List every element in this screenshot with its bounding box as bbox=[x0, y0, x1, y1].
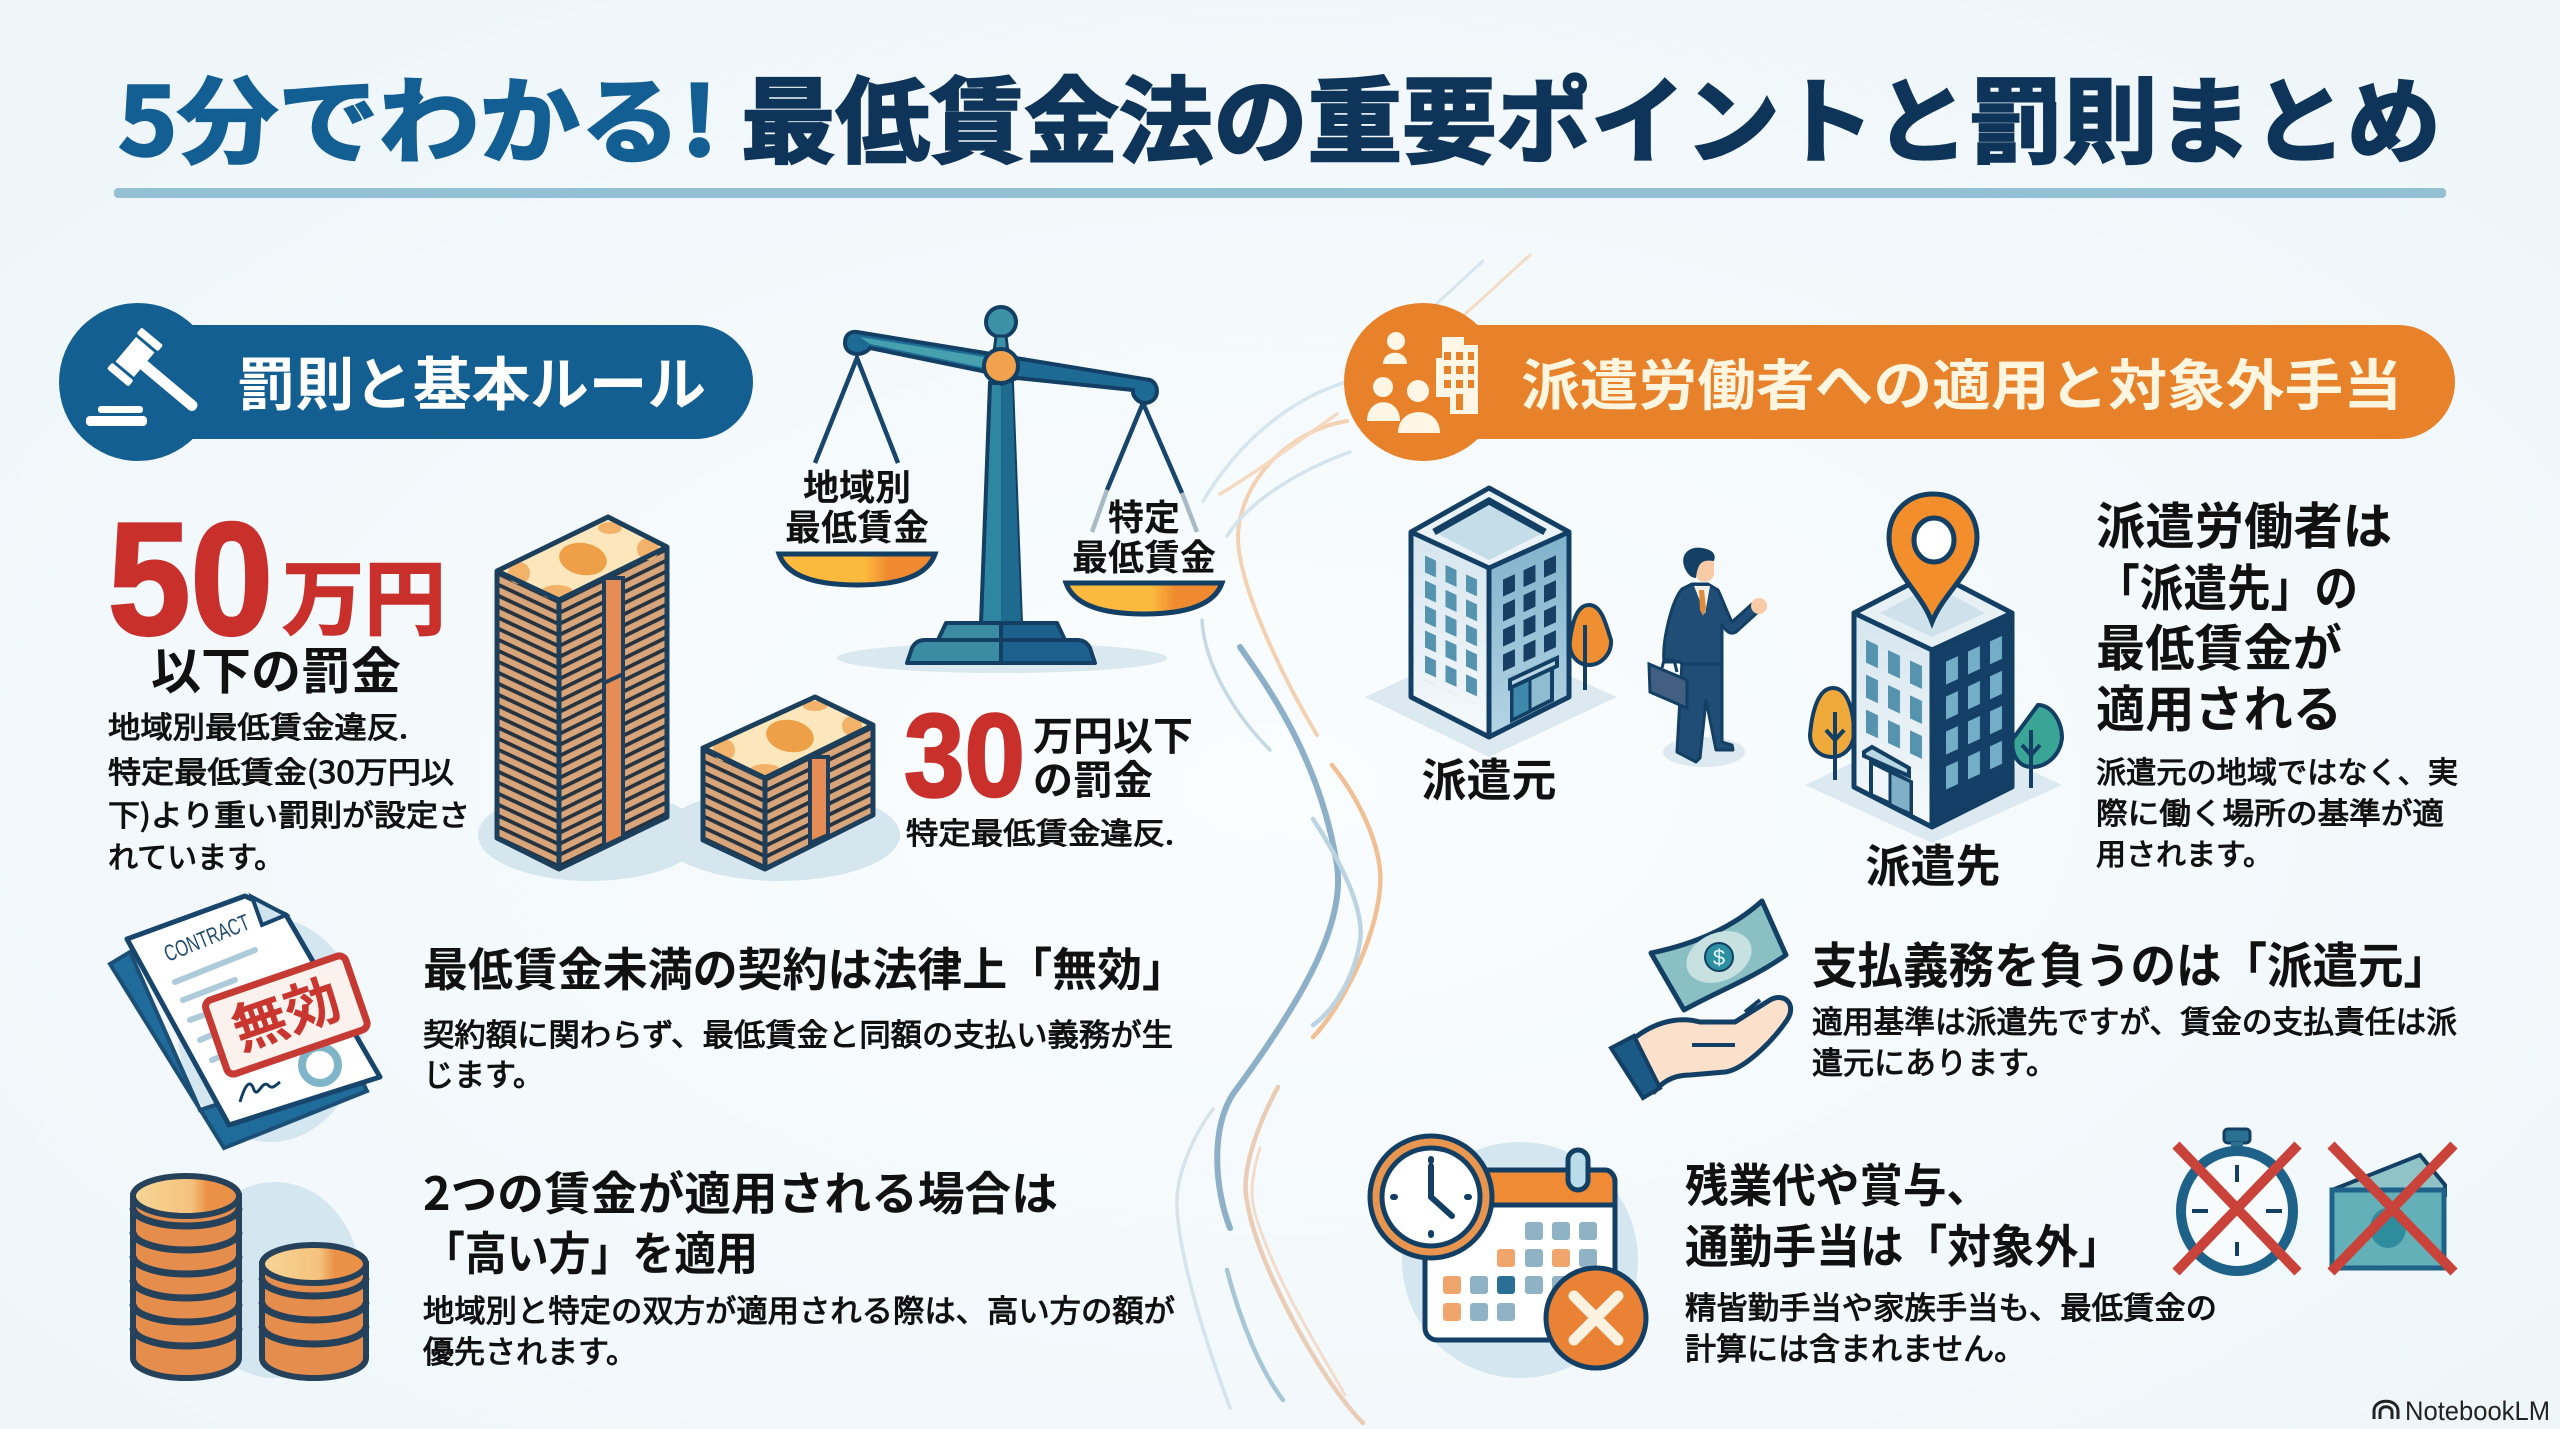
icon: void contract: CONTRACT bbox=[160, 909, 253, 967]
text block: payment duty lies with dispatching company: 遣元にあります。 bbox=[1812, 1038, 2057, 1083]
callout: 500,000 yen fine: 特定最低賃金(30万円以 bbox=[108, 748, 454, 792]
icon: host company building with location pin bbox=[1805, 494, 2062, 843]
text block: higher wage applies: 2つの賃金が適用される場合は bbox=[423, 1158, 1058, 1224]
label: dispatching company: 派遣元 bbox=[1421, 744, 1557, 809]
icon: crossed-out stopwatch bbox=[2176, 1129, 2298, 1272]
text block: overtime and allowances excluded bbox=[1685, 1150, 2217, 1369]
text block: contract below minimum wage is void bbox=[423, 934, 1187, 1095]
text block: payment duty lies with dispatching company: 支払義務を負うのは「派遣元」 bbox=[1812, 927, 2449, 998]
scale labels: 最低賃金 bbox=[785, 499, 929, 551]
logo: NotebookLM: NotebookLM bbox=[2405, 1396, 2550, 1426]
title: 最低賃金法の重要ポイントと罰則まとめ bbox=[741, 47, 2441, 183]
text block: host company minimum wage applies: 際に働く場所の基準が適 bbox=[2096, 789, 2444, 833]
icon: banknote and hand: $ bbox=[1713, 945, 1725, 970]
text block: higher wage applies: 「高い方」を適用 bbox=[423, 1218, 758, 1284]
heading: dispatched workers pill bbox=[1344, 303, 2455, 461]
callout: 500,000 yen fine: 地域別最低賃金違反. bbox=[108, 703, 408, 747]
text block: higher wage applies bbox=[423, 1158, 1175, 1372]
icon: tree bbox=[1570, 605, 1611, 690]
text block: overtime and allowances excluded: 計算には含まれません。 bbox=[1685, 1324, 2025, 1369]
callout: 500,000 yen fine: 下)より重い罰則が設定さ bbox=[108, 791, 470, 835]
label: host company: 派遣先 bbox=[1865, 830, 2001, 895]
text block: higher wage applies: 地域別と特定の双方が適用される際は、高い方の額が bbox=[423, 1286, 1175, 1331]
icon: businessman with briefcase bbox=[1649, 548, 1767, 767]
text block: overtime and allowances excluded: 精皆勤手当や家族手当も、最低賃金の bbox=[1685, 1283, 2217, 1328]
icon: balance scale bbox=[779, 307, 1222, 673]
text block: contract below minimum wage is void: 最低賃金未満の契約は法律上「無効」 bbox=[423, 934, 1187, 1000]
text block: payment duty lies with dispatching company: 適用基準は派遣先ですが、賃金の支払責任は派 bbox=[1812, 997, 2457, 1042]
heading: penalties pill bbox=[59, 303, 753, 461]
callout: 500,000 yen fine: れています。 bbox=[108, 833, 284, 877]
icon: crossed-out cash bbox=[2331, 1145, 2454, 1272]
text block: overtime and allowances excluded: 通勤手当は「対象外」 bbox=[1685, 1211, 2122, 1277]
text block: overtime and allowances excluded: 残業代や賞与、 bbox=[1685, 1150, 1990, 1216]
text block: host company minimum wage applies bbox=[2096, 487, 2458, 874]
text block: host company minimum wage applies: 「派遣先」の bbox=[2096, 549, 2358, 621]
panel: dispatched workers and excluded allowances bbox=[1344, 303, 2458, 1378]
text block: host company minimum wage applies: 最低賃金が bbox=[2096, 609, 2342, 681]
scale labels bbox=[785, 459, 1216, 581]
icon: location pin bbox=[1889, 494, 1977, 622]
icon: void contract bbox=[110, 896, 380, 1148]
icon: money stacks bbox=[478, 517, 900, 881]
decorative flowing lines bbox=[1177, 255, 1530, 1423]
callout: 300,000 yen fine bbox=[904, 690, 1193, 853]
callout: 300,000 yen fine: 30 bbox=[904, 690, 1025, 822]
icon: clock and calendar bbox=[1370, 1136, 1646, 1378]
callout: 500,000 yen fine: 50 bbox=[108, 489, 273, 668]
small stack bbox=[703, 697, 873, 870]
heading: dispatched workers pill: 派遣労働者への適用と対象外手当 bbox=[1521, 341, 2402, 421]
text block: host company minimum wage applies: 派遣労働者は bbox=[2096, 487, 2392, 559]
text block: contract below minimum wage is void: 契約額に関わらず、最低賃金と同額の支払い義務が生 bbox=[423, 1010, 1173, 1055]
text block: payment duty lies with dispatching company bbox=[1812, 927, 2457, 1083]
callout: 500,000 yen fine: 以下の罰金 bbox=[151, 632, 401, 704]
icon: coin stacks bbox=[133, 1176, 366, 1378]
icon: people and building bbox=[1367, 332, 1478, 433]
text block: host company minimum wage applies: 派遣元の地域ではなく、実 bbox=[2096, 748, 2458, 792]
scale labels: 地域別 bbox=[803, 459, 911, 511]
large stack bbox=[497, 517, 667, 869]
icon: dispatching company building bbox=[1365, 488, 1617, 757]
text block: host company minimum wage applies: 用されます。 bbox=[2096, 830, 2273, 874]
text block: contract below minimum wage is void: じます。 bbox=[423, 1050, 544, 1095]
icon: gavel bbox=[86, 327, 214, 429]
panel: penalties and basic rules bbox=[59, 303, 1222, 1378]
icon: void contract: 無効 bbox=[220, 954, 350, 1066]
scale labels: 特定 bbox=[1108, 489, 1180, 541]
icon: banknote and hand bbox=[1611, 901, 1791, 1098]
title: 5分でわかる! bbox=[118, 47, 718, 183]
text block: higher wage applies: 優先されます。 bbox=[423, 1327, 637, 1372]
callout: 300,000 yen fine: 特定最低賃金違反. bbox=[906, 809, 1174, 853]
callout: 300,000 yen fine: 万円以下 bbox=[1033, 704, 1193, 762]
icon: trees bbox=[1810, 688, 2062, 788]
scale labels: 最低賃金 bbox=[1072, 529, 1216, 581]
callout: 300,000 yen fine: の罰金 bbox=[1033, 748, 1153, 806]
callout: 500,000 yen fine bbox=[108, 489, 470, 877]
text block: host company minimum wage applies: 適用される bbox=[2096, 670, 2342, 742]
callout: 500,000 yen fine: 万円 bbox=[282, 533, 446, 652]
heading: penalties pill: 罰則と基本ルール bbox=[237, 338, 706, 422]
